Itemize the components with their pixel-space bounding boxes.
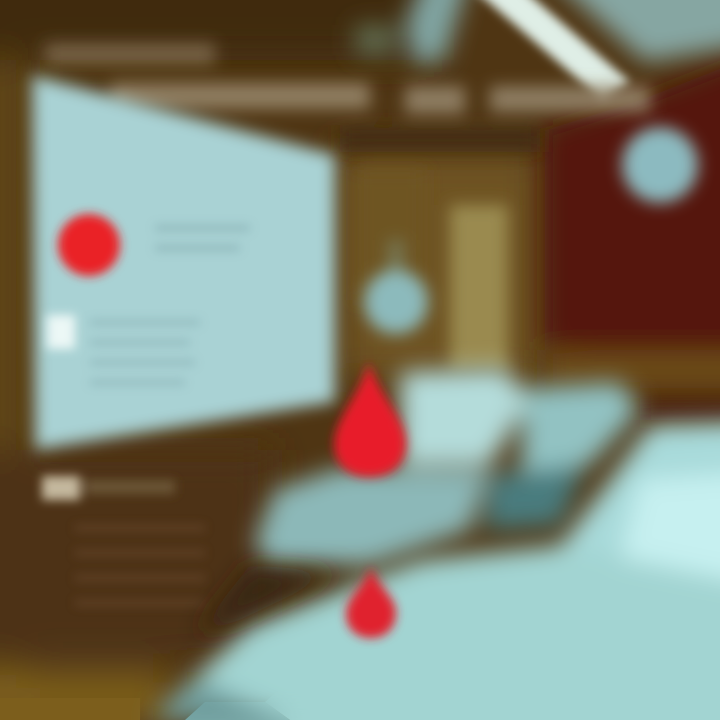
- dark shadow beside bed: [195, 565, 340, 635]
- right wall: dark red panel: [545, 45, 720, 420]
- icon: large red drop: [334, 362, 406, 477]
- icon: small red drop: [346, 566, 396, 638]
- text lines on wood: [75, 525, 205, 606]
- ceiling: light grey-teal corner: [355, 0, 720, 65]
- header: blurred title text: [45, 43, 650, 152]
- bed: cover backing along the bottom edge: [265, 680, 720, 720]
- caption below panel: [42, 476, 175, 500]
- wooden column: [355, 170, 508, 370]
- bed: mattress and covers: [150, 420, 720, 720]
- lamp: right: [622, 127, 698, 203]
- bed: dark corner backing: [185, 702, 290, 720]
- bed: pillows: [255, 368, 640, 565]
- icon: red circle: [58, 214, 120, 276]
- ceiling light beam: [440, 0, 630, 100]
- background: wooden wall and ceiling: [0, 0, 540, 720]
- lamp: centre: [364, 240, 428, 334]
- floor strip: [0, 698, 140, 720]
- panel text lines: [90, 225, 250, 385]
- wall panel: [32, 75, 335, 450]
- icon: white square: [47, 315, 75, 349]
